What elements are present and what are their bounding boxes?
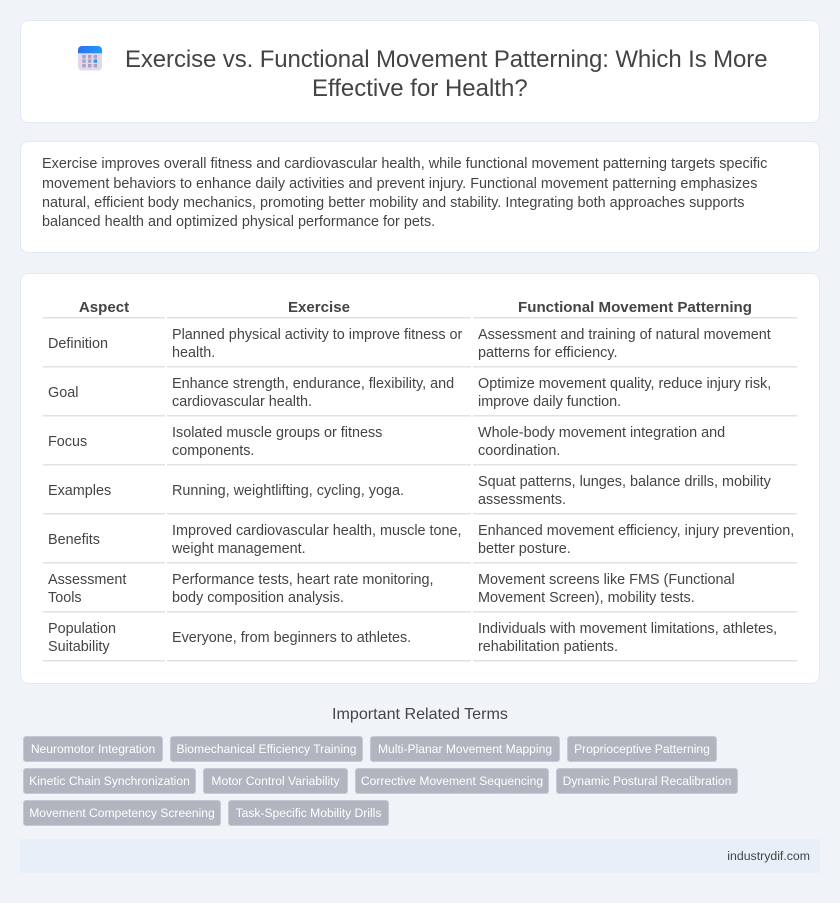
row: examples: Squat patterns, lunges, balance drills, mobility — [478, 474, 771, 490]
related term tags: Multi-Planar Movement Mapping — [378, 742, 552, 756]
row: definition: Definition — [48, 336, 108, 352]
row: population suitability: Everyone, from beginners to athletes. — [172, 630, 411, 646]
table header: Aspect — [79, 299, 129, 316]
row: focus: Focus — [48, 434, 87, 450]
row: assessment tools: Movement screens like FMS (Functional — [478, 572, 735, 588]
icon: calendar — [78, 46, 102, 70]
row: definition — [48, 327, 771, 361]
footer — [20, 839, 820, 873]
row: focus: Isolated muscle groups or fitness — [172, 425, 382, 441]
related term tags: Motor Control Variability — [211, 774, 340, 788]
intro text: movement behaviors to enhance daily activities and prevent injury. Functional movement patterning emphasizes — [42, 176, 757, 192]
row: goal: improve daily function. — [478, 394, 621, 410]
row: assessment tools: Performance tests, heart rate monitoring, — [172, 572, 434, 588]
related term tags: Task-Specific Mobility Drills — [236, 806, 381, 820]
row: goal — [48, 376, 771, 410]
row: population suitability: Individuals with movement limitations, athletes, — [478, 621, 777, 637]
row: benefits: better posture. — [478, 541, 571, 557]
row: definition: Assessment and training of natural movement — [478, 327, 771, 343]
related term tags: Dynamic Postural Recalibration — [563, 774, 731, 788]
related term tags: Biomechanical Efficiency Training — [177, 742, 356, 756]
intro text: natural, efficient body mechanics, promoting better mobility and stability. Integrating both approaches supports — [42, 195, 744, 211]
row: benefits: weight management. — [172, 541, 306, 557]
panel: title header — [20, 20, 820, 123]
panel: introduction — [20, 141, 820, 253]
title — [125, 46, 767, 102]
intro text — [42, 156, 767, 230]
row: examples — [48, 474, 771, 508]
row: definition: health. — [172, 345, 215, 361]
row: focus: coordination. — [478, 443, 560, 459]
row: benefits: Improved cardiovascular health, muscle tone, — [172, 523, 462, 539]
row: assessment tools: Assessment — [48, 572, 126, 588]
intro text: Exercise improves overall fitness and cardiovascular health, while functional movement patterning targets specific — [42, 156, 767, 172]
table header: Functional Movement Patterning — [518, 299, 752, 316]
row: assessment tools: Tools — [48, 590, 82, 606]
row: population suitability: Population — [48, 621, 116, 637]
row: assessment tools: body composition analysis. — [172, 590, 344, 606]
row: examples: Examples — [48, 483, 111, 499]
panel: comparison table — [20, 273, 820, 684]
related term tags: Proprioceptive Patterning — [574, 742, 710, 756]
title: Exercise vs. Functional Movement Patterning: Which Is More — [125, 46, 767, 73]
row: definition: Planned physical activity to improve fitness or — [172, 327, 462, 343]
row: benefits — [48, 523, 794, 557]
heading: important related terms: Important Related Terms — [332, 705, 508, 723]
row: population suitability: Suitability — [48, 639, 110, 655]
row: benefits: Benefits — [48, 532, 100, 548]
row: focus — [48, 425, 725, 459]
row: goal: cardiovascular health. — [172, 394, 312, 410]
row: focus: Whole-body movement integration and — [478, 425, 725, 441]
related term tags: Corrective Movement Sequencing — [361, 774, 543, 788]
row: assessment tools — [48, 572, 735, 606]
row: examples: Running, weightlifting, cycling, yoga. — [172, 483, 404, 499]
title: Effective for Health? — [312, 75, 528, 102]
related term tags: Movement Competency Screening — [29, 806, 215, 820]
related term tags: Neuromotor Integration — [31, 742, 155, 756]
row: population suitability — [48, 621, 777, 655]
related term tags: Kinetic Chain Synchronization — [29, 774, 190, 788]
row: assessment tools: Movement Screen), mobility tests. — [478, 590, 695, 606]
row: goal: Optimize movement quality, reduce injury risk, — [478, 376, 771, 392]
footer source text: industrydif.com — [727, 849, 810, 863]
row: goal: Enhance strength, endurance, flexibility, and — [172, 376, 454, 392]
table header — [79, 299, 752, 316]
row: definition: patterns for efficiency. — [478, 345, 617, 361]
row: benefits: Enhanced movement efficiency, injury prevention, — [478, 523, 794, 539]
row: goal: Goal — [48, 385, 78, 401]
row: examples: assessments. — [478, 492, 566, 508]
table header: Exercise — [288, 299, 350, 316]
intro text: balanced health and optimized physical performance for pets. — [42, 214, 435, 230]
table rows — [48, 327, 794, 655]
row: population suitability: rehabilitation patients. — [478, 639, 618, 655]
related term tags — [23, 736, 738, 826]
row: focus: components. — [172, 443, 254, 459]
